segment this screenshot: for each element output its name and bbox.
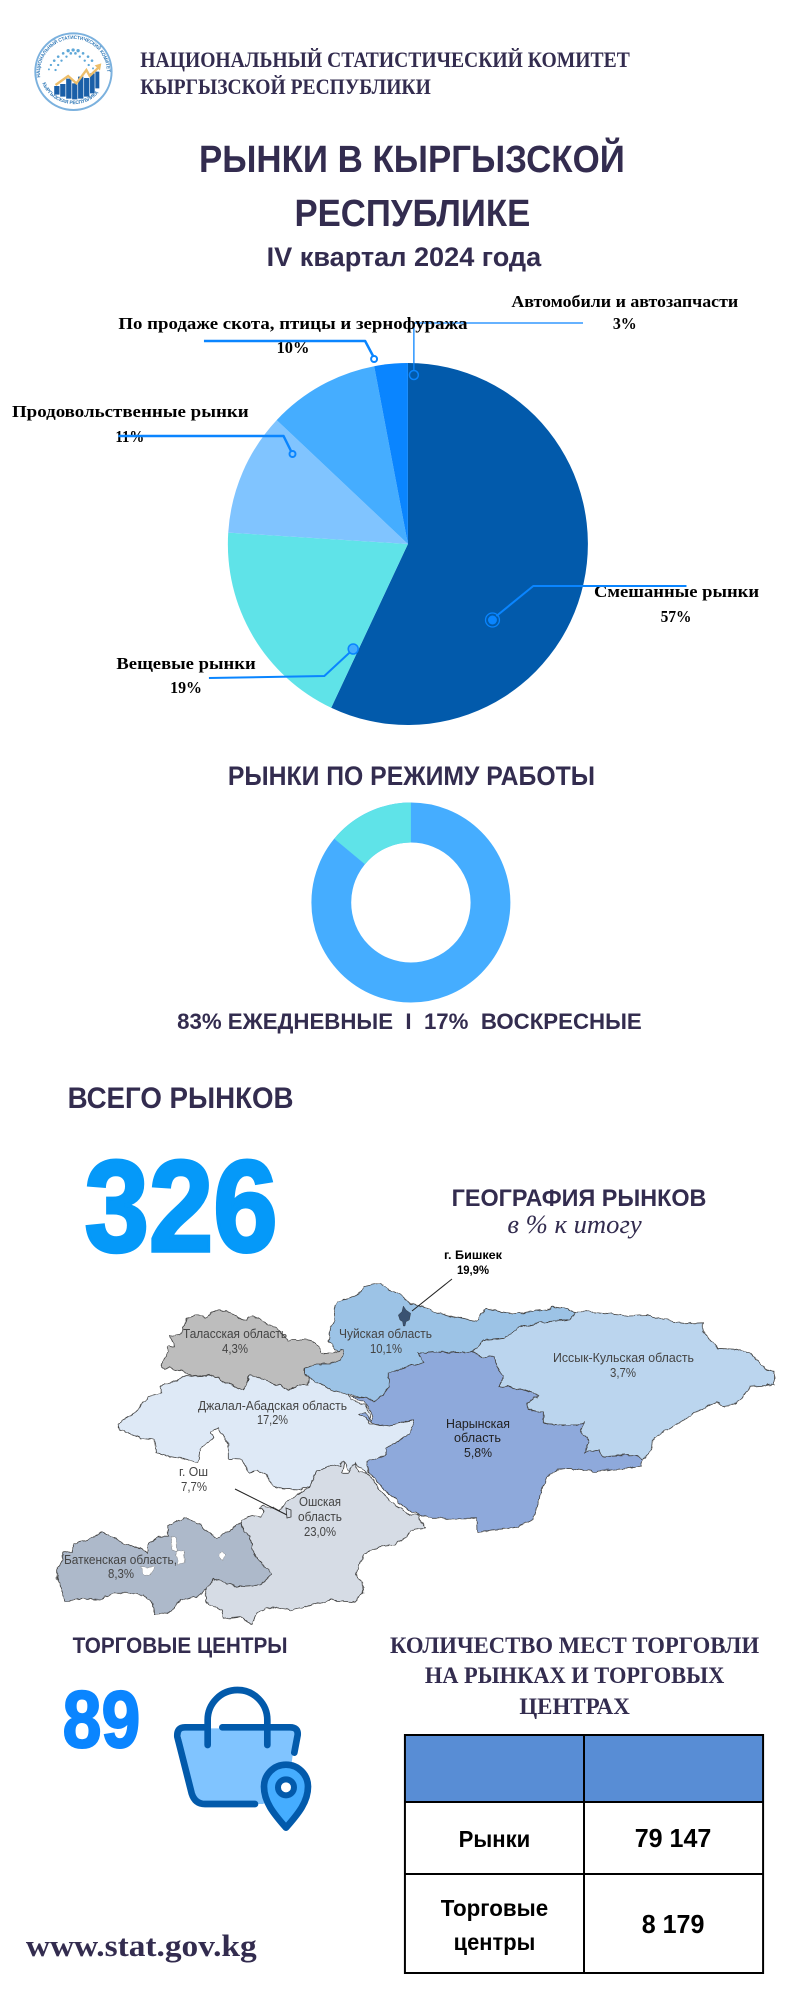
map of Kyrgyzstan by region bbox=[57, 1248, 774, 1625]
icon: Bishkek city bbox=[398, 1306, 411, 1326]
organisation name line 1: НАЦИОНАЛЬНЫЙ СТАТИСТИЧЕСКИЙ КОМИТЕТ bbox=[140, 47, 630, 72]
label: Batken: Баткенская область, bbox=[64, 1553, 177, 1567]
icon: statistics committee logo: НАЦИОНАЛЬНЫЙ СТАТИСТИЧЕСКИЙ КОМИТЕТ bbox=[36, 36, 110, 78]
callout: livestock: По продаже скота, птицы и зернофуража bbox=[118, 314, 468, 333]
label: Talas: Таласская область bbox=[183, 1327, 287, 1341]
big number: 326: 326 bbox=[85, 1135, 278, 1279]
label: Osh oblast bbox=[298, 1495, 342, 1539]
callout: food markets bbox=[12, 402, 295, 457]
callout: mixed markets: Смешанные рынки bbox=[594, 582, 760, 601]
label: Osh oblast: Ошская bbox=[299, 1495, 341, 1509]
label: Naryn: область bbox=[454, 1431, 501, 1445]
heading: shopping centres: ТОРГОВЫЕ ЦЕНТРЫ bbox=[73, 1633, 288, 1658]
callout: livestock: 10% bbox=[277, 338, 309, 357]
label: Osh oblast: область bbox=[298, 1510, 342, 1524]
region: Naryn bbox=[351, 1352, 642, 1532]
title: РЕСПУБЛИКЕ bbox=[294, 193, 530, 235]
label: Naryn bbox=[446, 1417, 510, 1460]
leader line: Osh city bbox=[235, 1489, 291, 1518]
heading: number of trading places: НА РЫНКАХ И ТОРГОВЫХ bbox=[425, 1663, 725, 1688]
title: РЫНКИ В КЫРГЫЗСКОЙ bbox=[199, 136, 625, 181]
label: Bishkek: г. Бишкек bbox=[444, 1248, 503, 1262]
title bbox=[199, 136, 625, 235]
label: Chui: 10,1% bbox=[370, 1342, 402, 1356]
heading: number of trading places: ЦЕНТРАХ bbox=[519, 1694, 630, 1719]
callout: cars and parts: Автомобили и автозапчасти bbox=[511, 292, 739, 311]
label: Jalal-Abad: 17,2% bbox=[257, 1413, 288, 1427]
heading: number of trading places bbox=[390, 1633, 759, 1719]
label: Osh city bbox=[179, 1465, 208, 1494]
callout: food markets: Продовольственные рынки bbox=[12, 402, 249, 421]
label: Talas bbox=[183, 1327, 287, 1356]
table: trading places bbox=[405, 1735, 763, 1973]
table header row bbox=[405, 1735, 763, 1802]
organisation name line 2: КЫРГЫЗСКОЙ РЕСПУБЛИКИ bbox=[140, 74, 431, 99]
label: Chui bbox=[339, 1327, 432, 1356]
label: Naryn: 5,8% bbox=[464, 1446, 492, 1460]
label: Issyk-Kul: Иссык-Кульская область bbox=[553, 1351, 694, 1365]
callout: livestock bbox=[118, 314, 468, 362]
slice: mixed markets 57% bbox=[331, 363, 588, 725]
callout: cars and parts bbox=[409, 292, 739, 380]
heading: markets by working mode: РЫНКИ ПО РЕЖИМУ РАБОТЫ bbox=[228, 761, 595, 791]
region: Jalal-Abad bbox=[118, 1375, 414, 1490]
row: markets bbox=[459, 1825, 711, 1853]
pie chart: market types bbox=[228, 363, 588, 725]
label: Jalal-Abad: Джалал-Абадская область bbox=[198, 1399, 347, 1413]
heading: geography of markets: ГЕОГРАФИЯ РЫНКОВ bbox=[452, 1185, 706, 1212]
icon: shopping bag with location pin bbox=[177, 1690, 308, 1828]
row: shopping centres: центры bbox=[454, 1929, 535, 1955]
row: shopping centres: Торговые bbox=[441, 1895, 548, 1921]
leader line: Bishkek bbox=[412, 1279, 452, 1311]
callout: mixed markets: 57% bbox=[661, 607, 691, 626]
callout: food markets: 11% bbox=[115, 427, 144, 446]
label: Issyk-Kul: 3,7% bbox=[610, 1366, 636, 1380]
slice: cars and parts 3% bbox=[374, 363, 408, 544]
label: Batken: 8,3% bbox=[108, 1567, 134, 1581]
subheading: percent of total: в % к итогу bbox=[507, 1210, 642, 1239]
row: shopping centres: 8 179 bbox=[642, 1911, 704, 1939]
label: Talas: 4,3% bbox=[222, 1342, 248, 1356]
donut chart: working mode bbox=[331, 802, 490, 982]
region: Osh oblast bbox=[206, 1462, 425, 1625]
label: Issyk-Kul bbox=[553, 1351, 694, 1380]
slice: food markets 11% bbox=[228, 420, 408, 544]
label: Jalal-Abad bbox=[198, 1399, 347, 1427]
icon: statistics committee logo bbox=[34, 32, 113, 111]
callout: mixed markets bbox=[486, 582, 760, 627]
heading: number of trading places: КОЛИЧЕСТВО МЕСТ ТОРГОВЛИ bbox=[390, 1633, 759, 1658]
region: Talas bbox=[161, 1310, 344, 1391]
donut legend: 83% ЕЖЕДНЕВНЫЕ I 17% ВОСКРЕСНЫЕ bbox=[177, 1009, 642, 1034]
label: Batken bbox=[64, 1553, 177, 1581]
label: Osh city: 7,7% bbox=[181, 1480, 207, 1494]
callout: clothing markets bbox=[116, 644, 358, 697]
row: markets: 79 147 bbox=[635, 1825, 711, 1853]
label: Naryn: Нарынская bbox=[446, 1417, 510, 1431]
row: markets: Рынки bbox=[459, 1826, 530, 1852]
icon: statistics committee logo: КЫРГЫЗСКАЯ РЕСПУБЛИКА bbox=[42, 82, 98, 104]
callout: cars and parts: 3% bbox=[613, 314, 637, 333]
heading: total markets: ВСЕГО РЫНКОВ bbox=[68, 1082, 293, 1115]
row: shopping centres bbox=[441, 1895, 704, 1955]
region: Batken bbox=[57, 1518, 272, 1615]
header: logo and organisation name bbox=[34, 32, 630, 111]
label: Osh oblast: 23,0% bbox=[304, 1525, 336, 1539]
big number: 89: 89 bbox=[63, 1675, 140, 1765]
slice: livestock markets 10% bbox=[277, 366, 408, 544]
callout: clothing markets: 19% bbox=[170, 678, 202, 697]
label: Bishkek bbox=[444, 1248, 503, 1277]
subtitle: IV квартал 2024 года bbox=[267, 242, 542, 272]
region: Issyk-Kul bbox=[472, 1312, 774, 1460]
label: Bishkek: 19,9% bbox=[457, 1263, 489, 1277]
footer: website: www.stat.gov.kg bbox=[26, 1928, 257, 1963]
label: Chui: Чуйская область bbox=[339, 1327, 432, 1341]
region: Chui bbox=[305, 1283, 576, 1402]
label: Osh city: г. Ош bbox=[179, 1465, 208, 1479]
slice: clothing markets 19% bbox=[228, 533, 408, 708]
callout: clothing markets: Вещевые рынки bbox=[116, 654, 256, 673]
